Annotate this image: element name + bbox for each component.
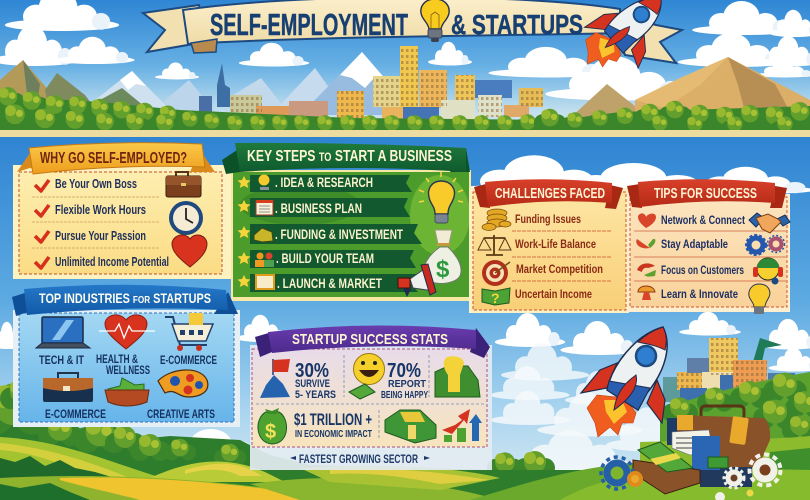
row text: Funding Issues xyxy=(515,212,581,226)
icon: red heart xyxy=(172,235,207,267)
stat: one trillion xyxy=(294,411,372,440)
stat: one trillion: IN ECONOMIC IMPACT xyxy=(295,429,372,440)
banner right tail xyxy=(610,12,682,63)
step ribbons xyxy=(250,175,422,292)
icon: megaphone xyxy=(398,264,436,297)
icon: shopping cart xyxy=(165,313,213,351)
stat: 70%: 70% xyxy=(387,360,421,382)
clouds: upper sky xyxy=(0,0,810,101)
icon: clock xyxy=(169,201,203,235)
ribbon: challenges faced xyxy=(474,179,623,209)
row text xyxy=(515,212,603,301)
stat: 30% xyxy=(295,360,336,401)
icon: coins xyxy=(482,209,511,230)
lower city windows xyxy=(677,338,767,390)
ribbon: challenges faced: CHALLENGES FACED xyxy=(495,186,605,202)
step text xyxy=(275,175,404,291)
footer: fastest growing sector: FASTEST GROWING SECTOR xyxy=(299,452,418,466)
case body xyxy=(667,418,680,445)
cash box xyxy=(633,460,700,494)
industry labels top row xyxy=(39,352,217,377)
stat: 30%: 5- YEARS xyxy=(295,389,336,401)
title text: SELF-EMPLOYMENT xyxy=(210,7,408,42)
icon: gears xyxy=(746,235,784,255)
panel: tips for success xyxy=(627,179,790,314)
step icons xyxy=(254,174,274,289)
panel: top industries xyxy=(12,285,240,427)
ribbon: top industries xyxy=(12,285,238,316)
row text: Learn & Innovate xyxy=(661,287,738,301)
icon: light bulb xyxy=(421,0,449,42)
icon: large rocket xyxy=(581,327,667,437)
title banner xyxy=(143,0,682,80)
landscape: green hills xyxy=(0,372,810,500)
icon: dollar bag: $ xyxy=(265,421,276,443)
list text: Flexible Work Hours xyxy=(55,203,146,217)
list text: Be Your Own Boss xyxy=(55,177,137,191)
banner left tail xyxy=(143,5,205,52)
icon: support agent xyxy=(753,258,783,284)
icon: question cash xyxy=(482,288,510,306)
ribbon: tips for success xyxy=(627,179,787,208)
row text: Focus on Customers xyxy=(661,263,744,277)
icon: cash and bulb xyxy=(435,356,480,397)
industry labels bottom row: E-COMMERCE xyxy=(45,407,106,421)
ribbon: tips for success: TIPS FOR SUCCESS xyxy=(654,186,757,202)
icon: dollar bag xyxy=(258,408,287,444)
row text: Stay Adaptable xyxy=(661,237,728,251)
icon: scales xyxy=(478,235,511,255)
industry labels top row: WELLNESS xyxy=(106,363,150,377)
icon: rocket xyxy=(574,0,664,80)
icon: palette xyxy=(158,370,208,397)
title banner: & STARTUPS xyxy=(451,9,583,40)
panel: why go self-employed xyxy=(13,143,231,279)
icon: briefcase xyxy=(166,172,201,197)
stat: 30%: 30% xyxy=(295,360,329,382)
checks xyxy=(35,180,49,268)
icon: cash basket xyxy=(105,378,149,406)
icon: small bulb xyxy=(749,284,770,314)
ribbon: key steps: KEY STEPS TO START A BUSINESS xyxy=(247,148,452,165)
gears xyxy=(607,463,627,483)
stars xyxy=(238,176,250,287)
stat: 30%: SURVIVE xyxy=(295,378,330,390)
row dividers xyxy=(634,231,786,281)
step text: . BUILD YOUR TEAM xyxy=(276,251,374,266)
banner main ribbon xyxy=(183,0,620,44)
icon: money stacks xyxy=(385,410,436,443)
case handle xyxy=(701,406,744,420)
background: beach strip and lower sky xyxy=(0,130,810,500)
icon: smiley with cash xyxy=(349,354,384,399)
ribbon: stats xyxy=(255,325,490,358)
icon: briefcase with cash and gears xyxy=(601,406,780,500)
clouds: lower sky xyxy=(0,155,810,474)
row text xyxy=(661,213,745,301)
document xyxy=(672,430,713,455)
icon: handshake xyxy=(749,213,790,233)
icon: question cash: ? xyxy=(491,290,500,306)
rocket fins xyxy=(581,363,617,393)
ribbon: key steps xyxy=(222,143,470,174)
panel: startup success stats xyxy=(250,325,492,470)
row text: Work-Life Balance xyxy=(515,237,596,251)
left row icons xyxy=(636,213,656,300)
stat: one trillion: $1 TRILLION + xyxy=(294,411,372,429)
rocket body xyxy=(607,327,667,410)
stat: 70%: BEING HAPPY xyxy=(381,389,428,401)
row text: Market Competition xyxy=(516,262,603,276)
list text: Pursue Your Passion xyxy=(55,229,146,243)
row text: Uncertain Income xyxy=(515,287,592,301)
industry labels top row: HEALTH & xyxy=(96,352,138,366)
list row dividers xyxy=(32,197,160,248)
icon: laptop xyxy=(36,317,90,348)
panel: key steps xyxy=(222,143,471,301)
icon: health heart xyxy=(99,315,155,349)
industry labels top row: TECH & IT xyxy=(39,353,85,367)
row dividers xyxy=(512,231,612,281)
dashed dividers xyxy=(256,355,484,440)
rocket flame xyxy=(587,395,636,437)
background: upper sky xyxy=(0,0,810,132)
stat: 70% xyxy=(381,360,428,401)
ribbon: why go self-employed: WHY GO SELF-EMPLOYED? xyxy=(40,150,187,167)
list text: Unlimited Income Potential xyxy=(55,255,169,269)
panel: challenges faced xyxy=(469,179,629,313)
ribbon: stats: STARTUP SUCCESS STATS xyxy=(292,331,448,348)
step text: . IDEA & RESEARCH xyxy=(275,175,373,190)
icon: target xyxy=(482,260,510,286)
mountains xyxy=(0,52,810,120)
industry labels bottom row xyxy=(45,407,215,421)
icon: growth arrows xyxy=(442,409,482,442)
step text: . LAUNCH & MARKET xyxy=(277,276,383,291)
icon: money bag: $ xyxy=(436,256,450,283)
step text: . FUNDING & INVESTMENT xyxy=(275,227,404,242)
city skyline xyxy=(199,46,543,123)
distant city, lower right xyxy=(663,338,795,405)
icon: money bag xyxy=(423,230,461,284)
trees along the shore xyxy=(0,87,810,135)
stat: 70%: REPORT xyxy=(388,378,426,390)
row text: Network & Connect xyxy=(661,213,745,227)
industry labels bottom row: CREATIVE ARTS xyxy=(147,407,215,421)
icon: briefcase xyxy=(43,373,93,402)
icon: flag on peak xyxy=(260,359,290,398)
list text xyxy=(55,177,169,269)
industry labels top row: E-COMMERCE xyxy=(160,353,217,367)
building windows xyxy=(230,46,543,120)
ribbon: top industries: TOP INDUSTRIES FOR STARTUPS xyxy=(39,290,211,306)
icon: glowing bulb xyxy=(419,172,463,223)
step text: . BUSINESS PLAN xyxy=(275,201,362,216)
ribbon: why go self-employed xyxy=(17,143,215,174)
